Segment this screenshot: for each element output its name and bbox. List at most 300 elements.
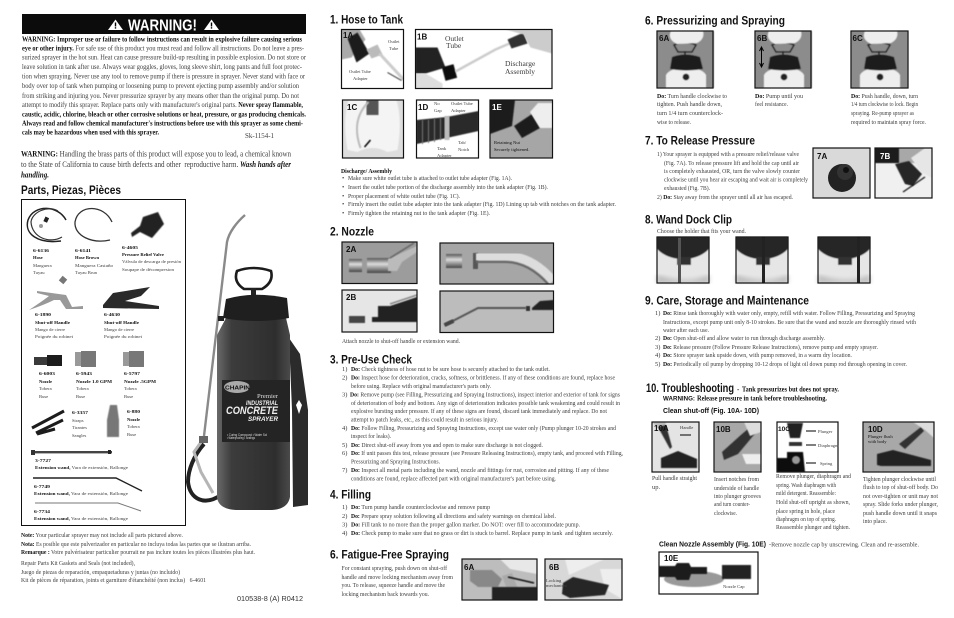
part: hose 6-6136: 6-6136: [33, 248, 50, 253]
figure 6B pump: 6B: [757, 34, 767, 43]
section 10: troubleshooting: [646, 381, 938, 594]
part: pressure relief valve 6-4605: Válvula de descarga de presión: [122, 259, 182, 264]
lead warning text: to the State of California to cause birth defects and other reproductive harm. Wash hands after: [21, 160, 292, 169]
figure 1A: Outlet Tube: [349, 69, 371, 74]
filling steps: Do: Fill tank to no more than the proper gallon marker. Do NOT: over fill to accommodate pump.: [351, 522, 580, 528]
caption 6C: [851, 93, 926, 126]
notes: Kit de pièces de réparation, joints et garniture d'étanchéité (non inclus) 6-4601: [21, 577, 206, 584]
part: nozzle 6-5797: Tobera: [124, 386, 137, 391]
part: extension wand 6-7749: 6-7749: [34, 484, 51, 489]
steps: water after each use.: [663, 327, 709, 334]
filling steps: Do: Turn pump handle counterclockwise and remove pump: [351, 504, 490, 511]
heading: 6. Fatigue-Free Spraying: [330, 548, 449, 562]
discharge assembly text: Insert the outlet tube portion of the discharge assembly into the tank adapter (Fig. 1B).: [348, 184, 548, 191]
steps: Do: Rinse tank thoroughly with water only, empty, refill with water. Follow Filling, Pressurizing and Spraying: [663, 310, 916, 317]
section 4: filling: [330, 488, 613, 537]
caption 6C: Do: Push handle, down, turn: [851, 93, 919, 100]
warning text block: body over top of tank when pumping or loosening pump to prevent ejecting pump assembly and/or solution: [22, 82, 299, 90]
discharge assembly text: •: [342, 175, 344, 182]
notes: [21, 532, 255, 584]
caption 10D: not over-tighten or unit may not: [863, 493, 938, 500]
clean nozzle assembly line: Clean Nozzle Assembly (Fig. 10E): [659, 540, 766, 548]
part: hose 6-6136: [27, 208, 66, 275]
caption 10D: into place.: [863, 518, 887, 525]
warning text block: Sk-1154-1: [245, 132, 274, 140]
part: nozzle 6-5797: 6-5797: [124, 371, 141, 376]
steps: 5): [655, 361, 660, 368]
checklist: 5): [342, 442, 347, 449]
warning text block: leave solution in tank after use. Always wear goggles, gloves, long sleeve shirt, long pants and full foot protec-: [22, 63, 303, 71]
part: extension wand 6-7749: Extension wand, Vara de extensión, Rallonge: [34, 491, 128, 497]
caption 10D: [863, 476, 938, 525]
lead warning text: WARNING: Handling the brass parts of this product will expose you to lead, a chemical known: [21, 150, 291, 158]
illustration: sprayer: [188, 215, 308, 510]
figure 10A: Handle: [680, 425, 693, 430]
part: nozzle 6-5797: Nozzle .5GPM: [124, 379, 157, 384]
caption 6B: feel resistance.: [755, 101, 788, 108]
checklist: Do: If unit passes this test, release pressure (see Pressure Releasing Instructions), empty tank, and proceed with Filling,: [351, 450, 623, 457]
icon: warning triangle left: [108, 20, 123, 30]
figure 10C: [777, 422, 839, 472]
checklist: Do: Check tightness of hose nut to be sure hose is securely attached to the tank outlet.: [351, 366, 550, 373]
section 7: release pressure: [645, 134, 932, 201]
warning text block: attempt to modify this sprayer. Replace parts only with manufacturer's original parts. Never spray flammable,: [22, 101, 303, 109]
caption 6A: turn 1/4 turn counterclock-: [657, 110, 723, 117]
part: straps 6-3357: Straps: [72, 418, 84, 423]
lead warning text: [21, 150, 292, 180]
figure 1E: Retaining Nut: [494, 140, 521, 145]
section 6: pressurizing and spraying: [645, 14, 926, 126]
part: nozzle 6-5797: Buse: [124, 394, 133, 399]
figure 2A close-up: [440, 243, 554, 284]
filling steps: Do: Prepare spray solution following all directions and safety warnings on chemical label.: [351, 513, 556, 520]
part: hose 6-6136: Tuyau: [33, 270, 45, 275]
caption 10A: up.: [652, 484, 660, 491]
warning heading: WARNING!: [128, 18, 197, 34]
caption 6A: wise to release.: [657, 119, 691, 126]
part: straps 6-3357: Tirantes: [72, 425, 87, 430]
section: fatigue-free spraying: [330, 548, 622, 600]
discharge assembly text: Discharge/ Assembly: [341, 168, 393, 175]
checklist: Do: Inspect hose for deterioration, cracks, softness, or brittleness. If any of these conditions are found, replace hose: [351, 374, 615, 382]
caption 10A: Pull handle straight: [652, 475, 697, 482]
checklist: Do: Remove pump (see Filling, Pressurizing and Spraying Instructions), inspect interior and exterior of tank for signs: [350, 392, 620, 398]
part: pressure relief valve 6-4605: Soupape de décompresion: [122, 267, 175, 272]
checklist: of deterioration of body and bottom. Any sign of deterioration indicates possible tank weakening and could result in: [351, 400, 621, 407]
part: nozzle 6-5943: Tobera: [76, 386, 89, 391]
part: nozzle 6-5797: [123, 351, 157, 399]
heading: 3. Pre-Use Check: [330, 352, 412, 366]
figure 10C: Plunger: [818, 429, 833, 434]
figure 10C: Diaphragm: [818, 443, 839, 448]
caption 10B: Insert notches from: [714, 476, 759, 483]
caption 10C: Hold shut-off upright as shown,: [776, 499, 850, 506]
section 9: care, storage and maintenance: [645, 294, 917, 368]
part: pressure relief valve 6-4605: [122, 212, 182, 272]
figure 7A: [813, 148, 870, 198]
intro text: Choose the holder that fits your wand.: [657, 228, 746, 235]
part: extension wand 3-7727: [31, 450, 128, 471]
part: nozzle 6-880: Tobera: [127, 424, 140, 429]
clean nozzle assembly line: [659, 540, 919, 548]
figure 1A: Adapter: [353, 76, 368, 81]
warning banner: [22, 14, 306, 34]
figure 1D: Outlet Tube: [451, 101, 473, 106]
figure 1C: [342, 100, 404, 158]
checklist: explosive bursting under pressure. If any of these signs are found, discard tank immediately and replace. Do not: [351, 408, 607, 415]
part: nozzle 6-5943: Nozzle 1.0 GPM: [76, 379, 113, 384]
figure 1B: 1B: [417, 32, 427, 42]
figure 1C: 1C: [347, 103, 357, 112]
filling steps: [342, 504, 613, 537]
figure 1D: Tank: [437, 146, 447, 151]
instructions: handle and move locking mechanism away from: [342, 574, 453, 581]
heading: parts: Parts, Piezas, Pièces: [21, 183, 121, 197]
sprayer label: [224, 381, 279, 440]
figure 10C: Spring: [820, 461, 833, 466]
warning text block: caustic, acidic, chlorine, bleach or other corrosive solutions or heat, pressure, or gas producing chemicals.: [22, 110, 306, 118]
discharge assembly text: •: [342, 201, 344, 208]
discharge assembly text: Firmly tighten the retaining nut to the tank adapter (Fig. 1E).: [348, 210, 490, 217]
filling steps: Do: Check pump to make sure that no grass or dirt is stuck to barrel. Replace pump in tank and tighten securely.: [351, 530, 613, 537]
caption 10D: flush to top of shut-off body. Do: [863, 484, 938, 491]
photo: clip 2: [736, 237, 788, 283]
steps: Instructions, except pump unit only 8-10 strokes. Be sure that the wand and nozzle are thoroughly rinsed with: [663, 319, 917, 326]
heading: 4. Filling: [330, 488, 371, 502]
part: nozzle 6-880: Buse: [127, 432, 136, 437]
part: hose brown 6-6141: Tuyau Brun: [75, 270, 98, 275]
section 1: hose to tank: [330, 12, 616, 217]
heading: 10. Troubleshooting: [646, 381, 734, 395]
figure 1E: Securely tightened.: [494, 147, 529, 152]
caption 6A: [657, 93, 727, 126]
part: hose brown 6-6141: Manguera Castaño: [75, 263, 114, 268]
part: extension wand 3-7727: 3-7727: [35, 458, 52, 463]
checklist: attempt to patch leaks, etc., as this could result in serious injury.: [351, 416, 498, 424]
steps: Do: Open shut-off and allow water to run through discharge assembly.: [663, 335, 825, 342]
caption 6C: spraying. Re-pump sprayer as: [851, 110, 914, 117]
caption 10B: underside of handle: [714, 485, 759, 492]
section 3: pre-use check: [330, 352, 623, 482]
part: extension wand 3-7727: Extension wand, Vara de extensión, Rallonge: [35, 465, 128, 471]
figure 1B: Assembly: [505, 67, 535, 76]
figure 6A pump: [657, 31, 714, 88]
figure 6B: [545, 559, 622, 600]
discharge assembly text: Make sure white outlet tube is attached to outlet tube adapter (Fig. 1A).: [348, 175, 512, 182]
figure 10D: [863, 422, 934, 472]
instructions: is completely exhausted, OR, turn the valve slowly counter: [664, 168, 801, 175]
steps: Do: Periodically oil pump by dropping 10-12 drops of light oil down pump rod through opening in cover.: [663, 361, 907, 368]
part: extension wand 6-7749: [33, 478, 142, 497]
caption 6C: 1/4 turn clockwise to lock. Begin: [851, 101, 919, 108]
figure 10E: [659, 552, 758, 594]
warning text block: from striking and injuring you. Never pressurize sprayer by any means other than the original pump. Do not: [22, 92, 299, 100]
figure 1E: [490, 100, 552, 158]
caption: Attach nozzle to shut-off handle or extension wand.: [342, 338, 460, 345]
warning text block: tion when spraying. Never use any tool to remove pump if there is pressure in sprayer. Never stand with face or: [22, 72, 306, 80]
figure 1B: Tube: [446, 41, 462, 50]
figure 1B: Outlet: [445, 34, 465, 43]
part: nozzle 6-6003: 6-6003: [39, 371, 56, 376]
figure 6A: [462, 559, 537, 600]
part: nozzle 6-880: Nozzle: [127, 417, 140, 422]
figure 1A: [342, 30, 404, 88]
checklist: before using. Replace with original manufacturer's parts only.: [351, 383, 491, 390]
figure 6B pump: [755, 31, 812, 88]
figure 1B: [416, 30, 552, 88]
checklist: 4): [342, 425, 347, 432]
figure 6C pump: [851, 31, 908, 88]
figure 6B: mechanism: [546, 583, 567, 588]
steps: Do: Store sprayer tank upside down, with pump removed, in a warm dry location.: [663, 352, 852, 359]
part: extension wand 6-7734: 6-7734: [34, 509, 51, 514]
part: nozzle 6-5943: [75, 351, 113, 399]
filling steps: 1): [342, 504, 347, 511]
figure 10B: 10B: [716, 425, 731, 434]
warning text block: WARNING: Improper use or failure to follow instructions can result in explosive failure causing serious: [22, 36, 302, 44]
figure 10D: 10D: [868, 425, 883, 434]
part: shut-off handle 6-1890: Mango de cierre: [35, 327, 65, 332]
figure 6C pump: 6C: [852, 34, 863, 43]
part: shut-off handle 6-1890: 6-1890: [35, 312, 52, 317]
part: pressure relief valve 6-4605: Pressure Relief Valve: [122, 252, 164, 257]
caption 10C: Reassemble plunger and tighten.: [776, 524, 850, 531]
heading: 1. Hose to Tank: [330, 12, 403, 26]
part: hose 6-6136: Hose: [33, 255, 43, 260]
filling steps: 2): [342, 513, 347, 520]
checklist: 1): [342, 366, 347, 373]
figure 6B: Locking: [546, 578, 562, 583]
figure 1D: Gap: [434, 108, 442, 113]
heading: 6. Pressurizing and Spraying: [645, 14, 785, 28]
checklist: Pressurizing and Spraying Instructions.: [351, 458, 440, 466]
checklist: Do: Direct shut-off away from you and open to make sure discharge is not clogged.: [351, 442, 543, 449]
caption 10B: clockwise.: [714, 510, 737, 517]
figure 2A: 2A: [346, 245, 356, 254]
steps: Do: Release pressure (Follow Pressure Release Instructions), remove pump and empty sprayer.: [663, 344, 878, 351]
figure 1A: Tube: [389, 46, 398, 51]
steps: 4): [655, 352, 660, 359]
figure 10A: [652, 422, 699, 472]
instructions: 1) Your sprayer is equipped with a pressure relief/release valve: [657, 151, 799, 158]
photo: clip 1: [657, 237, 709, 283]
warning text block: eye or other injury. For safe use of this product you must read and follow all instructions. Do not leave a pres-: [22, 44, 305, 52]
sprayer label: Premier: [257, 394, 278, 400]
part: shut-off handle 6-1890: Poignée du robinet: [35, 334, 74, 339]
figure 1D: Adapter: [437, 153, 452, 158]
figure 1A: 1A: [343, 31, 353, 40]
discharge assembly text: •: [342, 193, 344, 200]
subheading: -: [737, 386, 740, 394]
caption 10C: [776, 473, 852, 531]
checklist: 3): [342, 392, 347, 398]
figure 10E: 10E: [664, 554, 679, 563]
heading: 8. Wand Dock Clip: [645, 212, 732, 226]
figure 1D: 1D: [418, 103, 428, 112]
instructions: you. To release, squeeze handle and move the: [342, 582, 445, 589]
part: pressure relief valve 6-4605: 6-4605: [122, 245, 139, 250]
caption 10D: spray. Slide forks under plunger,: [863, 501, 938, 508]
part: nozzle 6-6003: [34, 355, 62, 399]
document code: 010538-8 (A) R0412: [237, 594, 303, 603]
part: nozzle 6-5943: 6-5943: [76, 371, 93, 376]
notes: Remarque : Votre pulvérisateur particulier pourrait ne pas inclure toutes les pièces illustrées plus haut.: [21, 549, 255, 556]
figure 7B: [875, 148, 932, 198]
caption 10C: spring. Wash diaphragm with: [776, 482, 837, 489]
checklist: 2): [342, 374, 347, 382]
figure 1A: Outlet: [388, 39, 400, 44]
part: nozzle 6-880: [107, 405, 141, 437]
discharge assembly text: Firmly insert the outlet tube adapter into the tank adapter (Fig. 1D) Lining up tab with notches on the tank adapter.: [348, 201, 616, 208]
filling steps: 4): [342, 530, 347, 537]
part: straps 6-3357: Sangles: [72, 433, 87, 438]
steps: 3): [655, 344, 660, 351]
heading: 2. Nozzle: [330, 224, 374, 238]
part: nozzle 6-6003: Buse: [39, 394, 48, 399]
part: hose brown 6-6141: Hose Brown: [75, 255, 99, 260]
instructions: [657, 151, 809, 201]
part: hose brown 6-6141: 6-6141: [75, 248, 92, 253]
warning line: Release pressure in tank before troubleshooting.: [697, 394, 827, 402]
figure 10E: Nozzle Cap: [723, 584, 745, 589]
figure 2A: [342, 242, 417, 284]
discharge assembly text: •: [342, 210, 344, 217]
figure 1B: Discharge: [505, 59, 536, 68]
figure 1D: Notch: [458, 147, 470, 152]
figure 1D: Tab/: [458, 140, 467, 145]
notes: Repair Parts Kit Gaskets and Seals (not included),: [21, 560, 135, 567]
figure 10C: 10C: [778, 426, 790, 433]
figure 10B: [714, 422, 761, 472]
figure 6B: 6B: [549, 563, 559, 572]
part: shut-off handle 6-1890: Shut-off Handle: [35, 320, 70, 325]
sprayer label: CONCRETE: [226, 405, 279, 417]
part: shut-off handle 6-4630: Shut-off Handle: [104, 320, 139, 325]
part: shut-off handle 6-4630: Poignée du robinet: [104, 334, 143, 339]
warning text block: cals may be hazardous when used with this sprayer.: [22, 128, 159, 136]
caption 6A: Do: Turn handle clockwise to: [657, 93, 727, 100]
caption 10B: [714, 476, 761, 517]
figure 10D: with body: [868, 439, 887, 444]
instructions: locking mechanism back towards you.: [342, 591, 429, 598]
figure 7A: 7A: [817, 152, 827, 161]
warning line: WARNING:: [663, 396, 695, 402]
part: extension wand 6-7734: [34, 503, 141, 522]
instructions: 2) Do: Stay away from the sprayer until all air has escaped.: [657, 194, 793, 201]
part: shut-off handle 6-1890: [29, 276, 83, 339]
caption 10D: Tighten plunger clockwise until: [863, 476, 936, 483]
checklist: Do: Follow Filling, Pressurizing and Spraying Instructions, except use water only (Pump plunger 10-20 strokes and: [351, 425, 617, 432]
caption 10C: diaphragm on top of spring.: [776, 516, 836, 523]
notes: Nota: Es posible que este pulverizador en particular no incluya todas las partes que se ilustran arriba.: [21, 541, 251, 548]
figure 1E: 1E: [492, 103, 502, 112]
part: nozzle 6-5943: Buse: [76, 394, 85, 399]
discharge assembly text: •: [342, 184, 344, 191]
checklist: [342, 366, 623, 482]
figure 1D: Adapter: [451, 108, 466, 113]
caption 6B: Do: Pump until you: [755, 93, 804, 100]
part: shut-off handle 6-4630: 6-4630: [104, 312, 121, 317]
caption 6A: tighten. Push handle down,: [657, 101, 722, 108]
steps: [655, 310, 917, 368]
heading: 7. To Release Pressure: [645, 134, 755, 148]
discharge assembly text: [341, 168, 616, 217]
part: nozzle 6-6003: Nozzle: [39, 379, 52, 384]
instructions: clockwise until you hear air escaping and wait air is completely: [664, 176, 809, 184]
caption 10B: into plunger grooves: [714, 493, 761, 500]
steps: 1): [655, 310, 660, 317]
checklist: Do: Inspect all metal parts including the wand, nozzle and fittings for rust, corrosion and pitting. If any of these: [351, 467, 609, 474]
sprayer label: • Curing Compound • Water Sol: [227, 433, 267, 437]
lead warning text: handling.: [21, 170, 49, 180]
heading: 9. Care, Storage and Maintenance: [645, 294, 809, 308]
subheading: clean shut-off: Clean shut-off (Fig. 10A- 10D): [663, 406, 759, 415]
sprayer label: INDUSTRIAL: [246, 401, 278, 407]
sprayer label: • Waterproofing • Sealings: [227, 436, 255, 440]
discharge assembly text: Proper placement of white outlet tube (Fig. 1C).: [348, 193, 460, 200]
clean nozzle assembly line: -Remove nozzle cap by unscrewing. Clean and re-assemble.: [769, 542, 919, 548]
tank note: Tank pressurizes but does not spray.: [742, 386, 839, 394]
figure 1D: [416, 100, 478, 158]
figure 1D: No: [434, 101, 440, 106]
caption 10A: [652, 475, 697, 491]
figure 7B: 7B: [880, 152, 890, 161]
caption 10C: mild detergent. Reassemble:: [776, 490, 836, 497]
instructions: [342, 565, 453, 598]
caption 6B: [755, 93, 804, 108]
figure 2B: 2B: [346, 293, 356, 302]
part: hose 6-6136: Manguera: [33, 263, 52, 268]
part: straps 6-3357: 6-3357: [72, 410, 89, 415]
checklist: 6): [342, 450, 347, 457]
instructions: For constant spraying, push down on shut-off: [342, 565, 448, 572]
section 2: nozzle: [330, 224, 554, 345]
caption 10D: push handle down until it snaps: [863, 510, 937, 517]
filling steps: 3): [342, 522, 347, 528]
part: extension wand 6-7734: Extension wand, Vara de extensión, Rallonge: [34, 516, 128, 522]
checklist: inspect for leaks).: [351, 433, 391, 440]
instructions: exhausted (Fig. 7B).: [664, 185, 710, 192]
steps: 2): [655, 335, 660, 342]
part: nozzle 6-6003: Tobera: [39, 386, 52, 391]
warning text block: surized sprayer in the hot sun. Heat can cause pressure build-up resulting in possible explosion. Do not store or: [22, 54, 307, 62]
figure 10D: Plunger flush: [868, 434, 893, 439]
instructions: (Fig. 7A). To release pressure lift and hold the cap until air: [664, 160, 800, 167]
caption 6C: required to maintain spray force.: [851, 119, 926, 126]
icon: warning triangle right: [204, 20, 219, 30]
panel: parts list: [22, 200, 186, 526]
part: nozzle 6-880: 6-880: [127, 409, 141, 414]
sprayer label: SPRAYER: [248, 417, 279, 423]
warning text block: [22, 36, 307, 140]
figure 2B: [342, 290, 417, 332]
part: shut-off handle 6-4630: [103, 287, 159, 339]
checklist: 7): [342, 467, 347, 474]
checklist: conditions are found, replace affected part with original manufacturer's part before using.: [351, 476, 556, 482]
figure 6A: 6A: [464, 563, 474, 572]
figure 10A: 10A: [654, 424, 669, 433]
part: hose brown 6-6141: [75, 208, 114, 275]
notes: Note: Your particular sprayer may not include all parts pictured above.: [21, 532, 183, 539]
figure 6A pump: 6A: [659, 34, 669, 43]
caption 10B: and turn counter-: [714, 501, 750, 508]
caption 10C: place spring in hole, place: [776, 508, 835, 515]
sprayer label: CHAPIN: [225, 386, 250, 392]
part: straps 6-3357: [32, 410, 89, 438]
photo: clip 3: [818, 237, 870, 283]
part: shut-off handle 6-4630: Mango de cierre: [104, 327, 134, 332]
caption 10C: Remove plunger, diaphragm and: [776, 473, 852, 480]
